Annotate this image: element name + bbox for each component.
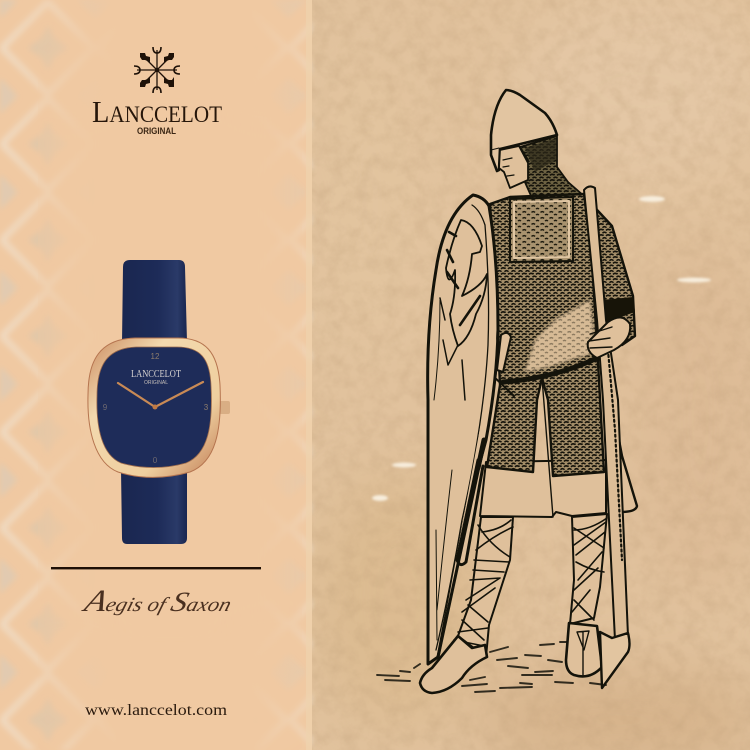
icon: Lanccelot compass emblem xyxy=(134,47,180,93)
dial numeral 6: 0 xyxy=(153,456,158,465)
belt xyxy=(503,358,597,382)
shield emblem xyxy=(446,220,487,346)
website address: www.lanccelot.com xyxy=(85,702,227,719)
watch hands xyxy=(118,382,203,410)
mail: torso xyxy=(487,194,604,476)
leg: left with wrappings xyxy=(454,517,513,657)
panel: left brand panel xyxy=(0,0,312,750)
scabbard xyxy=(438,330,498,657)
shield inner rim xyxy=(436,205,489,650)
dark side shading xyxy=(478,440,484,468)
spear shaft xyxy=(584,186,628,640)
watch crown xyxy=(219,401,230,414)
collection name: Aegis of Saxon xyxy=(79,584,237,618)
sword hilt xyxy=(490,333,514,396)
dial numeral 12: 12 xyxy=(151,352,160,361)
ground shading xyxy=(377,642,606,692)
leg: right with wrappings xyxy=(570,514,607,624)
foot: right shoe xyxy=(566,623,602,676)
tunic centre fold xyxy=(542,378,553,517)
logo wordmark: LANCCELOT xyxy=(92,94,222,129)
watch case xyxy=(88,338,220,477)
illustration: Saxon knight xyxy=(377,90,637,693)
helmet xyxy=(491,90,557,171)
foot: left shoe xyxy=(420,636,487,693)
dial brand name: LANCCELOT xyxy=(131,368,181,380)
face xyxy=(499,146,528,188)
mail: right arm xyxy=(585,197,635,345)
watch strap top xyxy=(122,260,187,342)
hand gripping spear xyxy=(588,317,630,358)
coif xyxy=(520,136,584,206)
wristwatch xyxy=(88,260,230,544)
shield xyxy=(428,195,498,664)
spear head xyxy=(600,632,630,688)
dial numeral 3: 3 xyxy=(204,403,209,412)
chest panel xyxy=(510,197,573,262)
divider rule xyxy=(51,567,261,569)
tunic skirt xyxy=(480,460,606,517)
spear shaft stipple xyxy=(608,350,622,560)
dial subtitle: ORIGINAL xyxy=(144,380,168,386)
watch strap bottom xyxy=(121,470,187,544)
mail: lit belly highlight xyxy=(525,300,596,372)
sleeve cuff xyxy=(602,297,635,322)
dial numeral 9: 9 xyxy=(103,403,108,412)
watch dial xyxy=(97,347,211,468)
cloak tail xyxy=(619,440,637,512)
panel: parchment background xyxy=(310,0,750,750)
logo subtitle: ORIGINAL xyxy=(137,126,176,136)
